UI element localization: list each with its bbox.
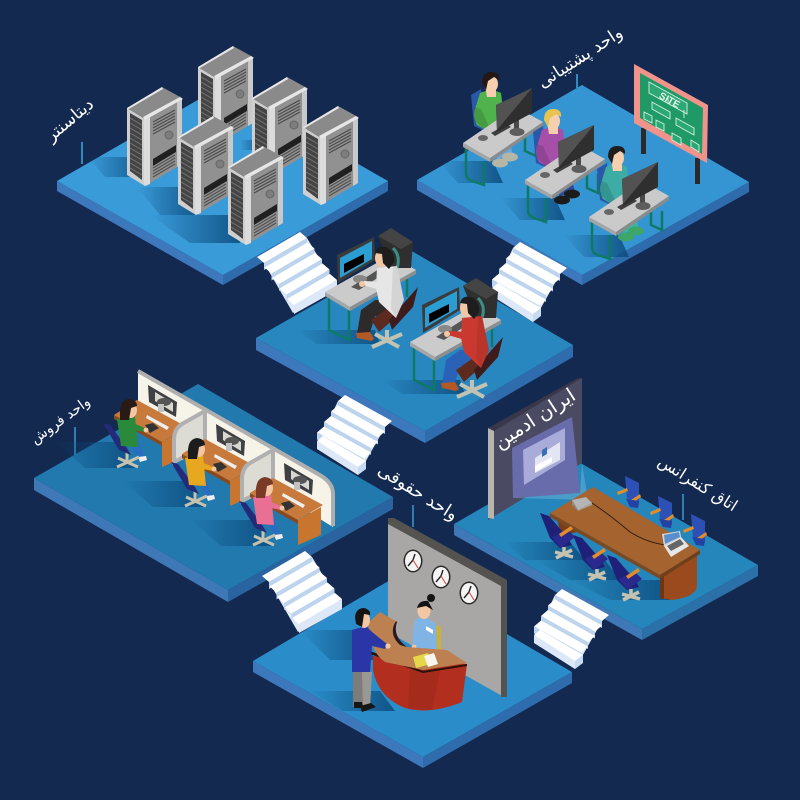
marker pole: conference	[682, 494, 684, 520]
label: conference room: اتاق کنفرانس	[654, 451, 741, 516]
conference table	[550, 487, 700, 600]
developer desk: white shirt	[295, 228, 418, 347]
marker pole: datacenter	[81, 142, 83, 164]
reception desk	[300, 612, 467, 711]
label: datacenter: دیتاسنتر	[41, 94, 98, 147]
stairs: conference to legal	[534, 589, 609, 669]
text: wall title: ایران ادمین	[489, 384, 580, 453]
panel: sales platform	[34, 384, 393, 602]
projection wall	[488, 378, 588, 520]
presentation board	[634, 64, 708, 184]
label: sales unit: واحد فروش	[28, 394, 93, 448]
marker pole: support	[576, 74, 578, 88]
workstation: purple shirt	[500, 109, 605, 222]
workstation: green shirt	[438, 72, 543, 185]
panel: legal platform	[253, 573, 572, 768]
laptop	[662, 531, 689, 557]
sales cubicles	[55, 371, 333, 546]
conference back chairs	[617, 476, 707, 546]
conference floor shadows	[505, 542, 670, 600]
visitor	[352, 608, 391, 712]
developer desk: red shirt	[380, 278, 503, 397]
stairs: sales to legal	[262, 551, 342, 633]
stairs: middle to sales	[317, 395, 392, 475]
panel: support platform	[417, 85, 749, 285]
label: support unit: واحد پشتیبانی	[534, 23, 626, 93]
label: legal unit: واحد حقوقی	[374, 460, 461, 525]
panel: middle platform	[256, 250, 573, 443]
conference front chairs	[540, 513, 642, 600]
projector	[572, 497, 592, 511]
stairs: datacenter to middle	[257, 232, 337, 314]
panel: conference platform	[454, 457, 758, 640]
stairs: support to middle	[492, 242, 567, 322]
marker pole: legal	[412, 505, 414, 527]
workstation: teal shirt	[564, 146, 669, 259]
reception wall with clocks	[388, 518, 507, 697]
panel: datacenter platform	[57, 86, 388, 285]
presentation board: SITE	[657, 91, 682, 111]
marker pole: sales	[74, 427, 76, 455]
receptionist	[412, 594, 441, 651]
server racks	[127, 46, 359, 245]
